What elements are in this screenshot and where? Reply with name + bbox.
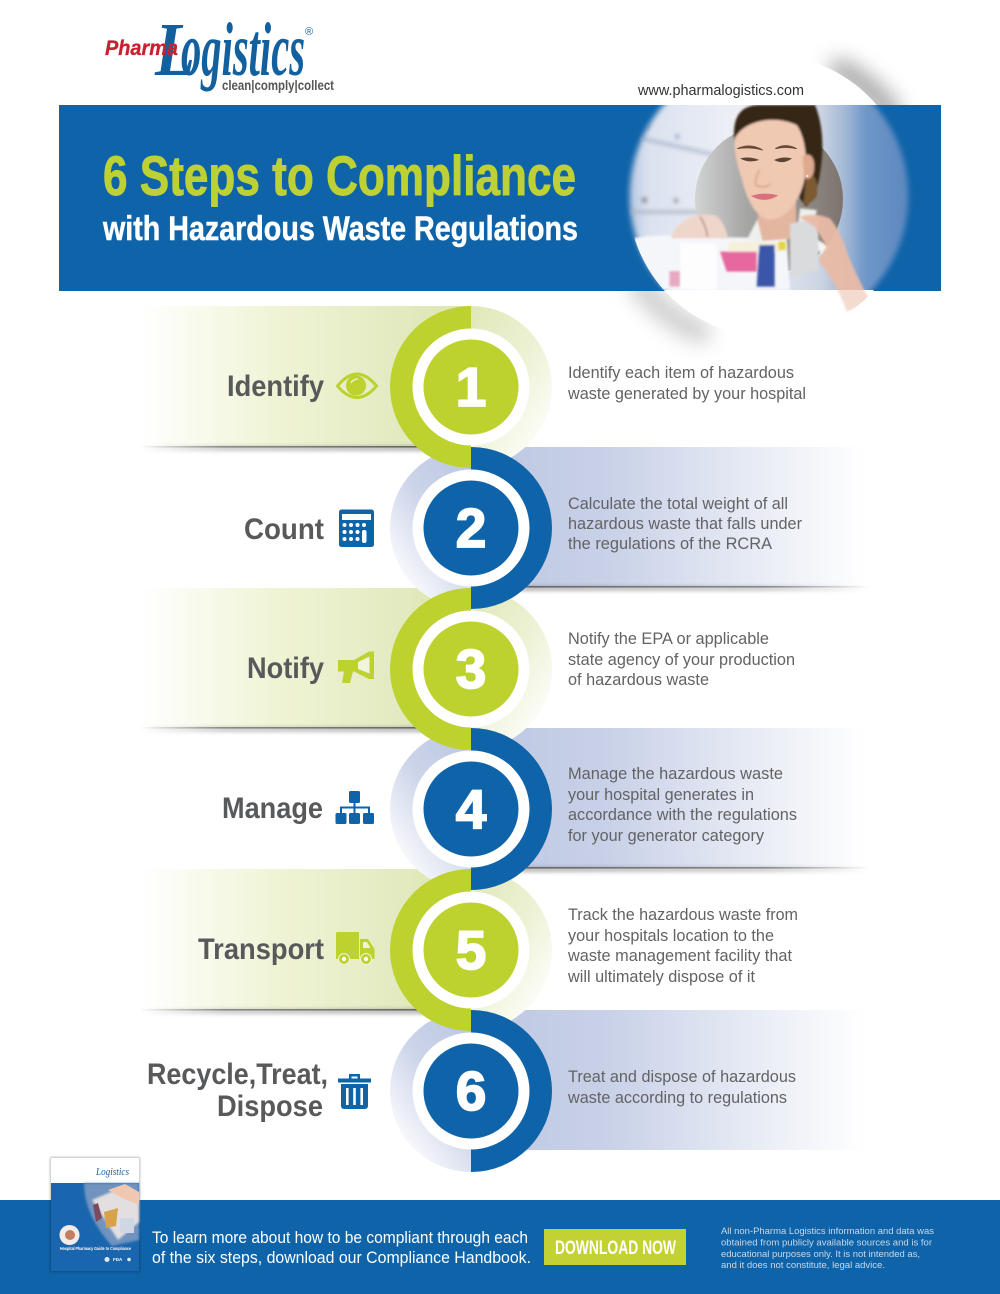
text: step 6: Treat and dispose of hazardous <box>568 1068 796 1086</box>
text: step 4: for your generator category <box>568 827 765 845</box>
text: step 4: Manage the hazardous waste <box>568 765 783 783</box>
logo: ogistics <box>181 8 305 92</box>
step 2 number <box>412 470 530 586</box>
call to action text <box>152 1229 531 1267</box>
disclaimer <box>721 1226 934 1271</box>
footer bar <box>0 1200 1000 1294</box>
inner circle tint <box>695 125 843 273</box>
text: step 5: Track the hazardous waste from <box>568 906 798 924</box>
handbook cover: Hospital Pharmacy Guide to Compliance <box>60 1246 132 1251</box>
step bands <box>140 306 871 1150</box>
text: step 5: will ultimately dispose of it <box>567 968 755 986</box>
disclaimer: and it does not constitute, legal advice. <box>721 1260 885 1271</box>
neck and collar <box>757 202 797 242</box>
logo: Pharma <box>105 37 178 60</box>
label: Recycle, Treat, Dispose <box>147 1058 328 1123</box>
handbook cover: FDA <box>113 1257 123 1262</box>
step 1 number: 1 <box>456 356 486 418</box>
left hand <box>672 214 728 238</box>
icon: eye <box>338 374 376 398</box>
text: step 5: your hospitals location to the <box>568 927 774 945</box>
hair <box>734 105 822 207</box>
logo <box>105 8 334 93</box>
solid half rings <box>390 306 552 1172</box>
title: 6 Steps to Compliance <box>103 144 576 207</box>
light half rings <box>390 306 552 1172</box>
label: Recycle, Treat, Dispose: Recycle,Treat, <box>147 1058 328 1091</box>
text: step 2 <box>568 495 802 553</box>
title <box>102 144 578 248</box>
text: step 2: the regulations of the RCRA <box>568 535 772 553</box>
icon: trash can <box>338 1074 371 1109</box>
text: step 6: waste according to regulations <box>567 1089 787 1107</box>
blue bottle <box>757 245 775 287</box>
icon: megaphone <box>338 652 374 683</box>
call to action text: of the six steps, download our Compliance Handbook. <box>152 1249 531 1267</box>
step 4 number <box>412 750 530 868</box>
text: step 2: Calculate the total weight of all <box>568 495 788 513</box>
icon: calculator <box>339 510 374 547</box>
text: step 6 <box>567 1068 796 1107</box>
disclaimer: educational purposes only. It is not intended as, <box>721 1249 920 1260</box>
text: step 4: your hospital generates in <box>568 786 754 804</box>
label: Transport: Transport <box>198 933 324 966</box>
text: step 4: accordance with the regulations <box>568 806 797 824</box>
logo: L <box>154 8 195 92</box>
blurred shelves background <box>629 124 713 216</box>
label: Count: Count <box>244 513 324 546</box>
text: step 3: of hazardous waste <box>568 671 709 689</box>
title: with Hazardous Waste Regulations <box>102 210 578 248</box>
disclaimer: All non-Pharma Logistics information and data was <box>721 1226 934 1237</box>
text: step 5: waste management facility that <box>567 947 792 965</box>
text: step 1 <box>567 364 806 403</box>
eyes, nose and lips <box>737 146 808 200</box>
face <box>735 120 806 219</box>
step 3 number <box>412 610 530 728</box>
step 6 number: 6 <box>456 1060 486 1122</box>
text: step 5 <box>567 906 798 986</box>
card <box>790 217 819 278</box>
step 5 number <box>412 892 530 1008</box>
header banner <box>59 105 941 291</box>
right hand <box>799 215 871 312</box>
label: Identify: Identify <box>227 370 324 403</box>
label: Recycle, Treat, Dispose: Dispose <box>217 1090 323 1123</box>
download button <box>544 1229 686 1265</box>
logo: ® <box>305 26 313 38</box>
step 3 number: 3 <box>456 638 486 700</box>
text: step 4 <box>568 765 797 845</box>
step 2 number: 2 <box>456 497 486 559</box>
step 5 number: 5 <box>456 919 486 981</box>
disclaimer: obtained from publicly available sources and is for <box>721 1238 933 1248</box>
handbook cover <box>50 1157 140 1272</box>
icon: org chart <box>336 791 374 824</box>
logo: clean|comply|collect <box>222 78 334 93</box>
label: Notify: Notify <box>247 652 324 685</box>
pink box <box>720 252 757 272</box>
text: step 1: waste generated by your hospital <box>567 385 806 403</box>
text: step 3: Notify the EPA or applicable <box>568 630 769 648</box>
step 6 number <box>412 1032 530 1150</box>
text: step 1: Identify each item of hazardous <box>568 364 794 382</box>
step 1 number <box>412 328 530 446</box>
step 4 number: 4 <box>456 778 487 840</box>
white shelf <box>633 235 790 290</box>
photo: pharmacist in circular frame <box>627 55 908 337</box>
label: Manage: Manage <box>222 792 323 825</box>
handbook cover: Logistics <box>95 1167 129 1178</box>
text: step 3: state agency of your production <box>568 651 795 669</box>
download button: DOWNLOAD NOW <box>555 1237 676 1259</box>
text: step 3 <box>568 630 795 689</box>
call to action text: To learn more about how to be compliant through each <box>152 1229 528 1247</box>
icon: truck <box>336 932 374 964</box>
text: step 2: hazardous waste that falls under <box>568 515 802 533</box>
photo shadow <box>640 70 890 332</box>
website url: www.pharmalogistics.com <box>637 83 804 99</box>
